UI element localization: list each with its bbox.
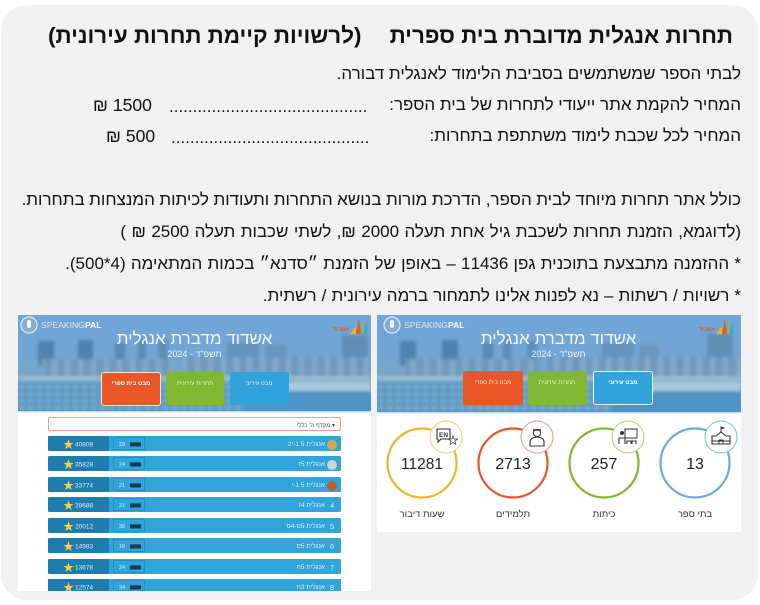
stat: classes: 257 [591,456,617,473]
row 5: אנגלית 5ס-4ס [287,522,325,530]
text: site price dots: .......................................... [169,97,367,116]
row 3: ★ [63,480,74,492]
row 7: 24 [119,565,125,571]
row 5: 38 [119,524,125,530]
tab: city competition [528,371,587,405]
row 1: אנגלית 5 1-י2 [288,440,325,448]
logo: Ashdod [333,316,367,334]
row 5: ★ [63,521,74,533]
row 2: ▆▆ [130,462,142,468]
stat: speaking hours: 11281 [401,456,443,473]
tab: city competition: תחרות עירונית [539,380,575,386]
banner year: תשפ"ד - 2024 [167,349,222,359]
row 4 [48,497,341,512]
row 3 [48,477,341,492]
text: order note: * ההזמנה מתבצעת בתוכנית גפן 11436 – באופן של הזמנת ״סדנא״ בכמות המתאימה (4*500). [65,254,741,273]
row 6: 16 [119,544,125,550]
stat: schools: בתי ספר [678,509,712,520]
text: example line: (לדוגמא, הזמנת תחרות לשכבת גיל אחת תעלה 2000 ₪, לשתי שכבות תעלה 2500 ₪ ) [120,222,741,241]
tab: city view active [594,372,652,404]
row 1: ★ [63,439,74,451]
tab: school view active [102,372,160,406]
row 6 [48,538,341,553]
row 4: 21 [119,503,125,509]
screenshot: city statistics view [377,315,741,532]
row 4: 4 [330,501,334,510]
row 8: אנגלית 3ח [297,583,325,591]
row 6: 6 [330,542,334,551]
title: parenthetical heading: (לרשויות קיימת תחרות עירונית) [48,23,361,48]
tab: city view active: מבט עירוני [608,380,638,386]
row 5: 20012 [75,524,93,530]
row 7: אנגלית 5ח [297,563,325,571]
row 7: ★ [63,562,74,574]
tab: city competition: תחרות עירונית [177,381,213,387]
row 5 [48,518,341,533]
row 2: אנגלית 5ז [299,460,325,468]
row 2: 24 [119,462,125,468]
stat: schools: 13 [686,456,704,473]
row 4: ★ [63,500,74,512]
stat: schools [660,421,737,520]
row 4: אנגלית 4ז [299,501,325,509]
row 2 [48,456,341,471]
banner title: אשדוד מדברת אנגלית [481,329,637,348]
tab: city view [230,372,289,405]
row 2: 35828 [75,462,93,468]
row 6: ★ [63,541,74,553]
header banner [18,315,371,411]
logo: Ashdod: אשדוד [699,327,715,333]
logo: SpeakingPal: SPEAKINGPAL [41,320,102,330]
row 1: ▆▆ [130,442,142,448]
logo: Ashdod [699,316,733,334]
tab: city view: מבט עירוני [245,381,273,387]
stat: classes [570,421,644,520]
text: audience line: לבתי הספר שמשתמשים בסביבת הלימוד לאנגלית דבורה. [337,64,741,83]
row 4: 28688 [75,502,93,510]
logo: SpeakingPal [384,317,465,333]
title: main heading: תחרות אנגלית מדוברת בית ספרית [390,23,733,48]
stat: speaking hours [388,421,462,520]
stat: students: 2713 [495,456,531,473]
logo: SpeakingPal: SPEAKINGPAL [404,320,465,330]
tab: city competition [166,372,224,405]
row 1: 29 [119,442,125,448]
row 1: 40809 [75,442,93,448]
row 1 [48,436,341,451]
banner year: תשפ"ד - 2024 [531,349,586,359]
stat: students: תלמידים [496,508,530,520]
filter dropdown: ▾ מקדף ה' כללי [297,421,335,429]
text: site price value: ₪ 1500 [93,95,152,115]
stat: speaking hours: שעות דיבור [400,509,445,520]
row 3: ▆▆ [130,483,142,489]
row 7: ▆▆ [130,565,142,571]
logo: Ashdod: אשדוד [333,327,349,333]
row 8: 34 [119,585,125,591]
row 3: 33774 [75,482,93,490]
row 7: 7 [330,563,334,572]
tab: school view: מבט בית ספרי [475,380,511,386]
leaderboard rows [48,436,341,594]
row 3: 21 [119,483,125,489]
row 6: 14983 [75,544,93,550]
stat: classes: כיתות [593,509,615,520]
text: grade price dots: .......................................... [171,128,369,147]
icon: speech bubble: EN [439,432,448,439]
text: grade price label: המחיר לכל שכבת לימוד משתתפת בתחרות: [430,126,741,145]
stat: students [478,421,553,520]
row 2: ★ [63,459,74,471]
row 4: ▆▆ [130,503,142,509]
logo: SpeakingPal [21,317,102,333]
icon: school [705,421,737,453]
screenshot: school leaderboard view [18,315,371,591]
filter dropdown [48,418,340,430]
row 3: אנגלית 5 1-י [292,481,325,489]
row 8: ▆▆ [130,585,142,591]
icon: classroom [612,421,644,453]
row 6: אנגלית 5ס [297,542,325,550]
header banner [377,315,741,412]
row 7 [48,559,341,574]
row 6: ▆▆ [130,544,142,550]
tab: school view [463,371,523,405]
icon: student [521,421,553,453]
text: municipalities note: * רשויות / רשתות – נא לפנות אלינו לתמחור ברמה עירונית / רשתית. [263,286,741,305]
text: grade price value: ₪ 500 [106,126,155,146]
icon: speech bubble [430,421,462,453]
text: site price label: המחיר להקמת אתר ייעודי לתחרות של בית הספר: [389,95,741,114]
banner title: אשדוד מדברת אנגלית [117,329,273,348]
text: includes line: כולל אתר תחרות מיוחד לבית הספר, הדרכת מורות בנושא התחרות ותעודות לכיתות המנצחות בתחרות. [22,190,741,209]
icon: speech bubble: ★ [448,436,458,447]
row 7: 13678 [75,564,93,572]
row 8 [48,579,341,594]
row 5: ▆▆ [130,524,142,530]
row 5: 5 [330,522,334,531]
tab: school view active: מבט בית ספרי [112,381,150,387]
